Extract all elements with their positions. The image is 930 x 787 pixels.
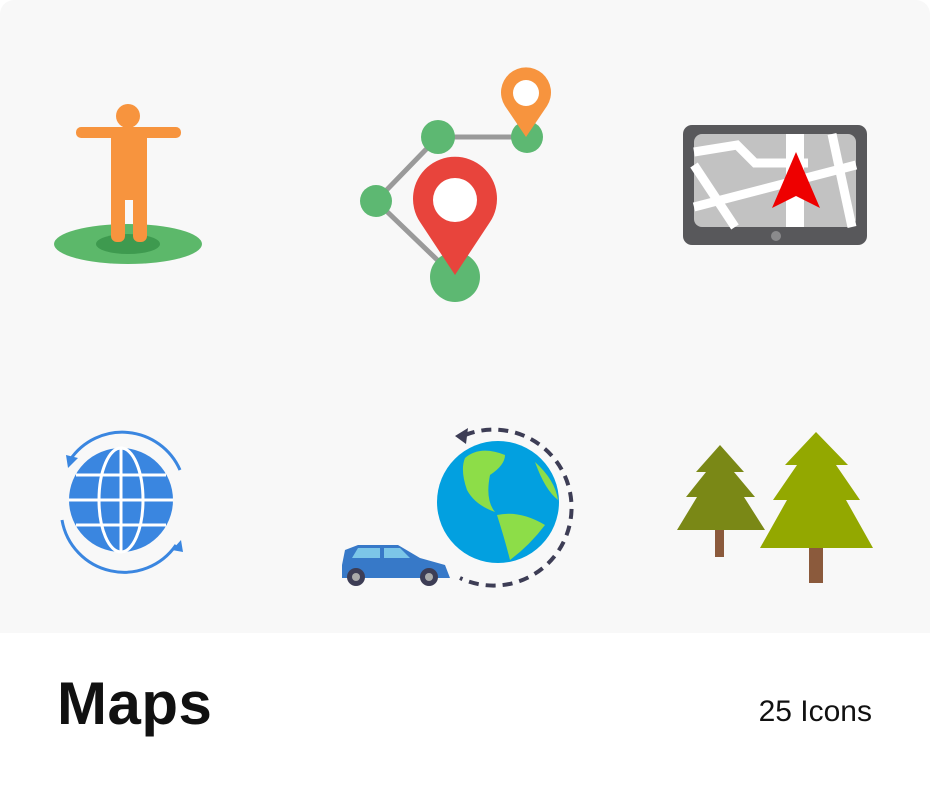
icon: pine trees	[677, 432, 873, 583]
title: Maps	[57, 670, 212, 737]
icon: person standing	[54, 104, 202, 264]
icon: GPS tablet	[683, 125, 867, 245]
icon: globe with arrows	[62, 432, 183, 572]
icon count: 25 Icons	[759, 695, 872, 728]
icon: route with pins	[360, 67, 551, 302]
icon: car around earth	[342, 428, 572, 586]
